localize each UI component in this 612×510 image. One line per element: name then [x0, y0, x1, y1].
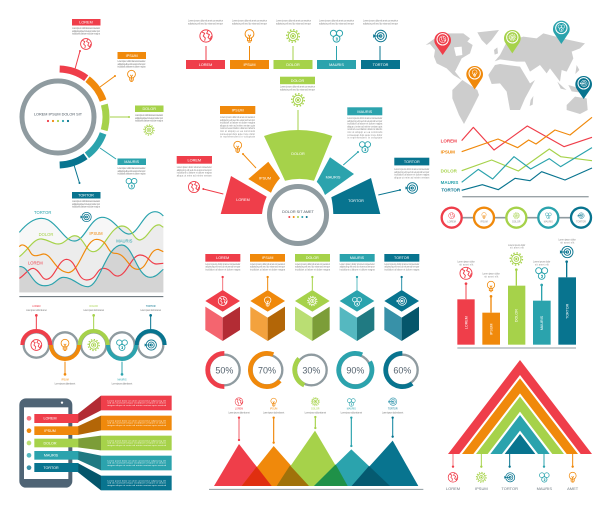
item mauris: Lorem ipsum dolor sit amet consectetur [319, 20, 354, 22]
donut 60% [379, 347, 426, 393]
callout: dolor: incididunt ut labore et dolore magna [135, 120, 164, 123]
mountains [214, 431, 418, 486]
item ipsum: adipiscing elit sed do eiusmod tempor [232, 22, 267, 25]
callout: mauris: aliqua ut enim ad minim veniam quis [347, 125, 383, 128]
panel: linked ring timeline [22, 306, 165, 385]
cube lorem: LOREM [216, 256, 229, 260]
cube tortor [384, 254, 420, 341]
gray rings [24, 332, 163, 358]
cube mauris: adipiscing elit sed do eiusmod tempor [340, 266, 375, 269]
item dolor [274, 20, 312, 69]
donut 70%: 70% [258, 365, 276, 375]
menu rows: MAURIS [44, 454, 59, 458]
ring with title [22, 81, 94, 153]
stems, icons and labels: IPSUM [475, 486, 488, 491]
menu rows: IPSUM [44, 429, 56, 433]
callout: mauris: adipiscing elit sed do eiusmod tempor [347, 120, 383, 123]
bar captions: sit amet elit [459, 263, 474, 266]
donut 50%: 50% [215, 365, 233, 375]
callout: tortor: incididunt ut labore et dolore magna [72, 206, 101, 209]
wave labels: IPSUM [89, 231, 103, 236]
callout: lorem: Lorem ipsum dolor sit amet consectetur [72, 27, 100, 30]
right text panels: sed do eiusmod tempor incididunt ut labore et dolore [107, 402, 167, 405]
callout: tortor [378, 158, 430, 195]
fold connectors [78, 396, 101, 490]
callout: dolor: adipiscing elit sed do eiusmod tempor [280, 88, 315, 91]
bar captions: sit amet elit [484, 275, 499, 278]
menu rows [27, 414, 78, 472]
cube dolor: Lorem ipsum dolor sit amet consectetur [295, 263, 330, 266]
coloured half rings [22, 331, 165, 359]
item tortor: Lorem ipsum dolor sit amet consectetur [363, 20, 398, 22]
callout: lorem: incididunt ut labore et dolore magna [72, 33, 101, 36]
pin dark [575, 76, 592, 99]
labels: Lorem ipsum dolor sit amet [83, 309, 104, 312]
cube mauris: Lorem ipsum dolor sit amet consectetur [340, 263, 375, 266]
menu rows: DOLOR [43, 441, 57, 445]
callout: ipsum: nisi ut aliquip ex ea commodo [220, 130, 256, 133]
ring with title: LOREM IPSUM DOLOR SIT [34, 112, 83, 116]
callout: dolor [280, 77, 315, 130]
callout: mauris: nostrud exercitation ullamco laboris [347, 128, 383, 131]
cube tortor: Lorem ipsum dolor sit amet consectetur [384, 263, 420, 266]
callout: tortor: TORTOR [78, 194, 94, 198]
item lorem: Lorem ipsum dolor sit amet consectetur [188, 20, 223, 22]
labels: Lorem ipsum dolor sit amet [26, 309, 47, 312]
phone body [19, 398, 72, 488]
panel: cubes and donuts [205, 254, 426, 393]
right text panels: Lorem ipsum dolor sit amet consectetur adipiscing elit [107, 439, 166, 442]
cube mauris: incididunt ut labore et dolore magna [340, 268, 375, 271]
cube ipsum: Lorem ipsum dolor sit amet consectetur [250, 263, 285, 266]
callout: mauris: in reprehenderit in voluptate [347, 137, 383, 140]
wave labels: LOREM [28, 261, 43, 266]
panel: top timeline row [186, 20, 400, 69]
right text panels: sed do eiusmod tempor incididunt ut labore et dolore [107, 442, 167, 445]
bar captions: Lorem ipsum dolor [558, 239, 576, 242]
callout: lorem: aliqua ut enim ad minim veniam [177, 174, 212, 177]
circle timeline [442, 208, 591, 228]
icons and captions: Lorem ipsum dolor sit amet [305, 411, 326, 414]
fan sectors: TORTOR [348, 199, 364, 203]
bar captions: sit amet elit [535, 263, 549, 266]
item lorem [186, 20, 225, 69]
stems [35, 314, 152, 376]
callout: tortor [72, 165, 101, 222]
stems [238, 416, 394, 447]
labels: Lorem ipsum dolor sit amet [140, 309, 161, 312]
item ipsum: IPSUM [243, 63, 256, 67]
icons and captions: IPSUM [270, 408, 277, 410]
stems, icons and labels: TORTOR [501, 486, 518, 491]
arc segments [0, 50, 125, 184]
bar captions: sit amet elit [560, 241, 575, 244]
labels: DOLOR [90, 306, 98, 308]
line chart labels: TORTOR [441, 188, 461, 193]
bars: IPSUM [489, 324, 493, 335]
fan sectors: LOREM [236, 198, 250, 202]
donut 90% [333, 347, 378, 393]
cube ipsum: incididunt ut labore et dolore magna [250, 268, 286, 271]
callout: lorem: LOREM [79, 20, 93, 24]
circle timeline: IPSUM [480, 221, 488, 223]
line chart labels: DOLOR [441, 168, 458, 173]
panel: smartphone menu [19, 396, 172, 490]
donut 70% [244, 347, 290, 393]
stems, icons and labels: MAURIS [537, 486, 552, 491]
central ring [270, 186, 326, 244]
labels: Lorem ipsum dolor sit amet [112, 382, 133, 385]
donut 30%: 30% [302, 365, 320, 375]
callout: ipsum: adipiscing elit sed do eiusmod tempor [118, 63, 146, 66]
map pins [434, 21, 592, 99]
callout: dolor: DOLOR [142, 107, 156, 111]
fan sectors [221, 130, 380, 214]
callout: ipsum: adipiscing elit sed do eiusmod tempor [220, 119, 255, 122]
wave lines [19, 212, 163, 297]
bar captions: Lorem ipsum dolor [508, 244, 526, 247]
callout: tortor: Lorem ipsum dolor sit amet consectetur [394, 168, 430, 171]
cube tortor: adipiscing elit sed do eiusmod tempor [384, 266, 420, 269]
cube mauris: MAURIS [350, 256, 365, 260]
callout: lorem [177, 156, 223, 194]
donut 90%: 90% [346, 365, 364, 375]
stems, icons and labels: AMET [567, 486, 579, 491]
callout: mauris: nisi ut aliquip ex ea commodo [347, 131, 383, 134]
labels [26, 306, 161, 385]
callout: tortor: adipiscing elit sed do eiusmod tempor [394, 171, 430, 174]
chevrons [448, 360, 592, 454]
callout: tortor: adipiscing elit sed do eiusmod tempor [72, 203, 100, 206]
line chart labels: IPSUM [441, 149, 455, 154]
callout: ipsum: in reprehenderit in voluptate [220, 136, 256, 139]
panel: fan diagram [177, 77, 430, 244]
fan sectors: DOLOR [291, 152, 305, 156]
icons and captions: Lorem ipsum dolor sit amet [382, 411, 404, 414]
cube lorem: incididunt ut labore et dolore magna [205, 268, 241, 271]
callout: tortor: incididunt ut labore et dolore magna [394, 174, 430, 177]
callout: dolor: adipiscing elit sed do eiusmod tempor [135, 117, 163, 120]
panel: world map with pins and line chart [426, 21, 592, 228]
circle timeline: TORTOR [576, 221, 586, 223]
callout: ipsum: nostrud exercitation ullamco laboris [220, 127, 256, 130]
item ipsum: Lorem ipsum dolor sit amet consectetur [232, 20, 267, 22]
callout: tortor: aliqua ut enim ad minim veniam [394, 176, 429, 179]
bars: LOREM [464, 316, 468, 329]
pin teal [553, 21, 570, 44]
fan sectors: MAURIS [326, 176, 341, 180]
item mauris [317, 20, 356, 69]
right text panels: magna aliqua ut enim ad minim veniam quis nostrud [107, 464, 167, 467]
callout: lorem [72, 19, 101, 69]
callout: ipsum: incididunt ut labore et dolore magna [220, 122, 256, 125]
item tortor: TORTOR [373, 63, 389, 67]
right text panels: Lorem ipsum dolor sit amet consectetur adipiscing elit [107, 419, 166, 422]
bars [457, 277, 576, 345]
cube lorem: Lorem ipsum dolor sit amet consectetur [205, 263, 241, 266]
right text panels: sed do eiusmod tempor incididunt ut labore et dolore [107, 462, 167, 465]
callout: lorem: LOREM [188, 158, 201, 162]
cube lorem [205, 254, 241, 341]
labels: TORTOR [146, 306, 156, 308]
callout: ipsum: Lorem ipsum dolor sit amet consectetur [220, 116, 255, 119]
bar captions: Lorem ipsum dolor [457, 261, 475, 264]
circle timeline: LOREM [448, 221, 456, 223]
item mauris: adipiscing elit sed do eiusmod tempor [319, 22, 354, 25]
central ring: DOLOR SIT AMET [282, 210, 315, 214]
bar captions: Lorem ipsum dolor [533, 261, 551, 264]
callout: ipsum: incididunt ut labore et dolore magna [118, 66, 146, 69]
callout: ipsum: IPSUM [232, 108, 244, 112]
callout: dolor: Lorem ipsum dolor sit amet consectetur [280, 86, 315, 88]
bar captions: sit amet elit [510, 247, 524, 250]
callout: dolor [110, 106, 164, 135]
cube tortor: incididunt ut labore et dolore magna [384, 268, 420, 271]
cube dolor: adipiscing elit sed do eiusmod tempor [295, 266, 330, 269]
callout: lorem: Lorem ipsum dolor sit amet consectetur [177, 166, 212, 169]
callout: dolor: DOLOR [291, 79, 305, 83]
right text panels: magna aliqua ut enim ad minim veniam quis nostrud [107, 404, 167, 407]
callout: ipsum: Lorem ipsum dolor sit amet consectetur [118, 60, 146, 63]
callout: lorem: incididunt ut labore et dolore magna [177, 172, 212, 175]
icons and captions [228, 398, 404, 414]
item mauris: MAURIS [329, 63, 344, 67]
labels: Lorem ipsum dolor sit amet [55, 382, 76, 385]
cube dolor [295, 254, 331, 341]
bar captions [457, 239, 576, 278]
item tortor [361, 20, 400, 69]
bars: MAURIS [540, 315, 544, 330]
icons and captions: LOREM [235, 408, 243, 410]
pin red [434, 32, 451, 55]
cube dolor: DOLOR [306, 256, 319, 260]
callout: mauris: MAURIS [124, 160, 140, 164]
line chart labels: MAURIS [441, 180, 458, 185]
icons [31, 339, 156, 351]
donut 60%: 60% [393, 365, 411, 375]
callout: tortor: Lorem ipsum dolor sit amet consectetur [72, 200, 100, 203]
right text panels: sed do eiusmod tempor incididunt ut labore et dolore [107, 482, 167, 485]
callout: mauris: Lorem ipsum dolor sit amet consectetur [347, 117, 383, 120]
cube tortor: TORTOR [394, 256, 410, 260]
labels: IPSUM [61, 379, 69, 381]
item dolor: Lorem ipsum dolor sit amet consectetur [276, 20, 311, 22]
callout: mauris [343, 107, 383, 165]
right text panels: Lorem ipsum dolor sit amet consectetur adipiscing elit [107, 479, 166, 482]
item lorem: adipiscing elit sed do eiusmod tempor [188, 22, 223, 25]
callout: lorem: adipiscing elit sed do eiusmod tempor [177, 169, 212, 172]
cube mauris [340, 254, 375, 341]
line chart labels: LOREM [441, 138, 457, 143]
right text panels: magna aliqua ut enim ad minim veniam quis nostrud [107, 484, 167, 487]
right text panels: magna aliqua ut enim ad minim veniam quis nostrud [107, 444, 167, 447]
stems and icons [460, 246, 573, 313]
callout: lorem: adipiscing elit sed do eiusmod tempor [72, 30, 100, 33]
panel: bar chart [457, 239, 576, 348]
icons and captions: Lorem ipsum dolor sit amet [341, 411, 362, 414]
stems, icons and labels: LOREM [446, 486, 460, 491]
cube lorem: adipiscing elit sed do eiusmod tempor [205, 266, 241, 269]
item dolor: DOLOR [286, 63, 300, 67]
wave area fills [19, 212, 163, 292]
item ipsum [230, 20, 269, 69]
callout: mauris: incididunt ut labore et dolore magna [118, 173, 146, 176]
line chart [462, 117, 592, 197]
callout: mauris: incididunt ut labore et dolore magna [347, 123, 383, 126]
callout: mauris: MAURIS [357, 110, 373, 114]
right text panels: magna aliqua ut enim ad minim veniam quis nostrud [107, 424, 167, 427]
right text panels [101, 396, 172, 490]
callout: ipsum: aliqua ut enim ad minim veniam quis [220, 124, 256, 127]
cube ipsum: adipiscing elit sed do eiusmod tempor [250, 266, 285, 269]
donut 30% [289, 348, 333, 392]
wave labels: MAURIS [116, 239, 133, 244]
right text panels: Lorem ipsum dolor sit amet consectetur adipiscing elit [107, 459, 166, 462]
circle timeline: MAURIS [544, 220, 553, 223]
item lorem: LOREM [199, 63, 212, 67]
axis [457, 346, 576, 349]
wave labels [28, 210, 133, 266]
callout: ipsum [100, 52, 146, 87]
callout: mauris [100, 148, 146, 189]
circle timeline: DOLOR [512, 221, 521, 223]
labels: MAURIS [117, 378, 127, 381]
pin orange [466, 66, 483, 89]
wave labels: TORTOR [34, 210, 51, 215]
item tortor: adipiscing elit sed do eiusmod tempor [363, 22, 398, 25]
callout: dolor: Lorem ipsum dolor sit amet consectetur [135, 114, 163, 117]
cube ipsum [250, 254, 286, 341]
callout: tortor: TORTOR [404, 160, 420, 164]
menu rows: TORTOR [43, 466, 59, 470]
callout: ipsum [220, 106, 256, 168]
item dolor: adipiscing elit sed do eiusmod tempor [276, 22, 311, 25]
right text panels: Lorem ipsum dolor sit amet consectetur adipiscing elit [107, 399, 166, 402]
stems, icons and labels [446, 454, 579, 491]
fan sectors: IPSUM [259, 176, 271, 180]
icons and captions: TORTOR [388, 408, 398, 410]
panel: overlapping mountains [209, 398, 423, 489]
panel: wave chart [19, 210, 163, 297]
callout: mauris: Lorem ipsum dolor sit amet consectetur [118, 167, 146, 170]
right text panels: sed do eiusmod tempor incididunt ut labore et dolore [107, 422, 167, 425]
callout: ipsum: IPSUM [126, 54, 138, 58]
icons and captions: MAURIS [347, 407, 356, 410]
bar captions: Lorem ipsum dolor [482, 273, 500, 276]
callout: mauris: adipiscing elit sed do eiusmod tempor [118, 170, 146, 173]
icons and captions: DOLOR [311, 408, 320, 410]
world map [426, 30, 588, 124]
donut 50% [208, 353, 241, 387]
baseline [209, 488, 423, 491]
panel: layered triangle [446, 360, 592, 491]
menu rows: LOREM [43, 417, 57, 421]
icons and captions: Lorem ipsum dolor sit amet [228, 411, 250, 414]
cube dolor: incididunt ut labore et dolore magna [295, 268, 331, 271]
icons and captions: Lorem ipsum dolor sit amet [263, 411, 285, 414]
callout: mauris: consequat duis aute irure dolor [347, 134, 383, 137]
line chart labels [441, 138, 461, 193]
pin green [504, 30, 521, 53]
cube ipsum: IPSUM [262, 256, 273, 260]
panel: circular diagram [0, 19, 164, 222]
bars: DOLOR [515, 309, 519, 322]
wave labels: DOLOR [39, 232, 53, 237]
bars: TORTOR [565, 303, 569, 319]
labels: LOREM [32, 306, 41, 308]
callout: ipsum: consequat duis aute irure dolor [220, 133, 255, 136]
